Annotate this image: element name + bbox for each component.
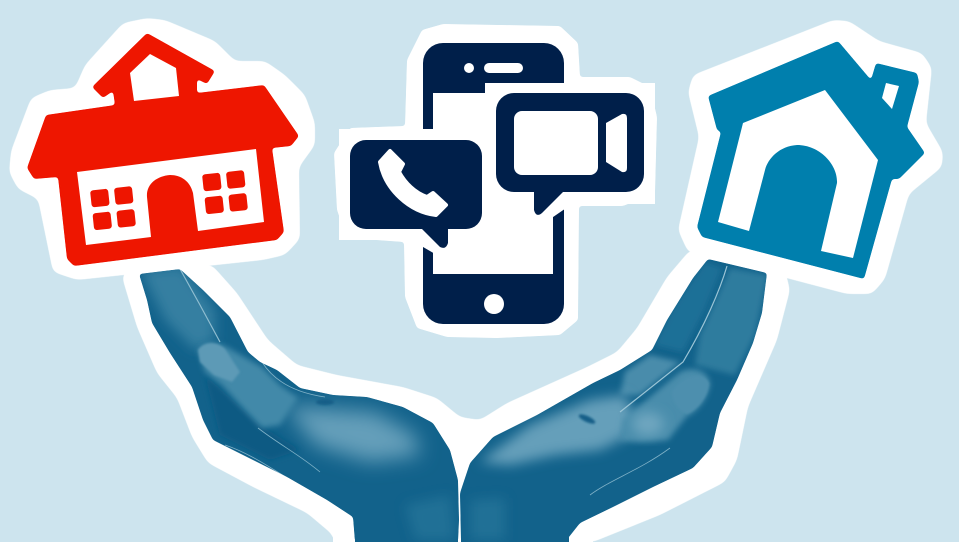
right hand: outer finger bbox=[695, 268, 768, 375]
right hand: finger crease bbox=[620, 266, 727, 412]
video bubble halo bbox=[485, 83, 655, 226]
right hand: lower crease bbox=[590, 448, 670, 495]
white sticker outline: hands bbox=[122, 250, 790, 542]
icon: video camera body bbox=[514, 111, 598, 175]
school wall with door bbox=[77, 149, 264, 245]
right hand: palm highlight bbox=[480, 395, 640, 465]
left hand: thumb bbox=[198, 343, 298, 428]
red school icon sticker bbox=[9, 18, 315, 280]
left hand: knuckle fold bbox=[316, 399, 334, 405]
home wall with door bbox=[718, 90, 878, 258]
phone camera dot bbox=[464, 63, 474, 73]
left hand: palm highlight bbox=[285, 405, 420, 462]
home roof and body bbox=[697, 41, 925, 279]
icon: telephone handset bbox=[380, 151, 446, 215]
left hand bbox=[130, 260, 465, 542]
phone home button bbox=[484, 294, 504, 314]
white sticker outline: phone bbox=[334, 24, 657, 338]
school roof and body bbox=[27, 33, 299, 266]
left hand: lower wrist tone bbox=[409, 498, 452, 539]
blue home icon sticker bbox=[678, 20, 943, 294]
school left windows bbox=[90, 186, 136, 230]
left hand: palm crease bbox=[225, 362, 325, 488]
call bubble halo bbox=[339, 129, 493, 258]
home chimney window bbox=[882, 83, 899, 109]
call bubble bbox=[350, 140, 482, 248]
left hand: finger crease bbox=[180, 269, 220, 342]
right hand: thumb nail bbox=[686, 379, 710, 414]
white sticker outline: school bbox=[9, 18, 315, 280]
right hand bbox=[455, 250, 775, 542]
white sticker outline: home bbox=[678, 20, 943, 294]
left hand: fingers shading bbox=[140, 266, 215, 350]
video bubble bbox=[496, 93, 644, 215]
right hand: knuckle fold bbox=[578, 412, 596, 426]
right hand: thumb highlight bbox=[632, 412, 664, 436]
school right windows bbox=[202, 170, 248, 214]
phone screen bbox=[433, 93, 553, 274]
right hand: lower palm tone bbox=[471, 500, 504, 539]
phone speaker bbox=[484, 63, 523, 73]
phone with call bubbles sticker bbox=[334, 24, 657, 338]
right hand: palm pad bbox=[620, 355, 680, 395]
left hand: thumb nail bbox=[198, 343, 240, 382]
icon: video camera lens bbox=[606, 114, 627, 172]
right hand: inner finger bbox=[658, 264, 720, 350]
phone body bbox=[423, 43, 564, 324]
right hand: thumb bbox=[620, 369, 710, 442]
school attic window bbox=[130, 54, 179, 101]
left hand: shadow under thumb bbox=[207, 382, 296, 460]
